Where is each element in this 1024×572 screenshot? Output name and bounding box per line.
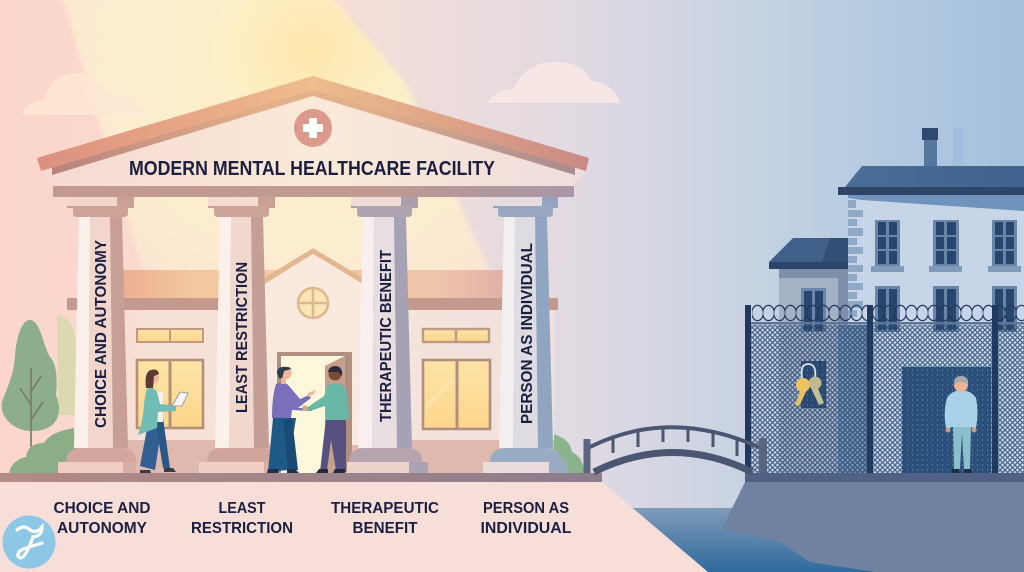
- fence mesh: [751, 325, 1024, 473]
- quoins: [848, 200, 863, 317]
- bridge: [584, 427, 767, 473]
- water: [630, 508, 900, 572]
- fence rail: [751, 322, 1024, 324]
- label: choice and autonomy: CHOICE AND: [54, 500, 150, 517]
- column 4: [483, 197, 568, 473]
- label: least restriction: LEAST: [218, 500, 266, 517]
- column label: choice and autonomy: CHOICE AND AUTONOMY: [93, 240, 110, 428]
- left window: [137, 360, 203, 428]
- eave: [67, 298, 558, 310]
- fence posts: [745, 305, 998, 473]
- column 3: [347, 197, 428, 473]
- porch floor: [76, 440, 554, 473]
- bush right: [552, 434, 584, 473]
- title: MODERN MENTAL HEALTHCARE FACILITY: [129, 158, 496, 180]
- ground strip left: [0, 473, 602, 482]
- cloud right: [488, 62, 620, 103]
- label: choice and autonomy: AUTONOMY: [57, 520, 148, 537]
- sun rays: [60, 0, 505, 345]
- figure: man in teal: [302, 366, 349, 473]
- label: therapeutic benefit: [331, 500, 439, 537]
- side prison wing: [769, 238, 848, 473]
- figure: man in purple: [267, 366, 316, 473]
- windows upper: [871, 220, 904, 272]
- background building: [67, 251, 558, 473]
- central gable: [265, 254, 364, 445]
- right transom window: [423, 329, 489, 342]
- label: person as individual: PERSON AS: [483, 500, 569, 517]
- column label: person as individual: PERSON AS INDIVIDUAL: [519, 243, 536, 424]
- label: least restriction: RESTRICTION: [191, 520, 293, 537]
- cross badge: [294, 109, 332, 147]
- label: therapeutic benefit: THERAPEUTIC: [331, 500, 439, 517]
- label: therapeutic benefit: BENEFIT: [352, 520, 418, 537]
- column 2: [199, 197, 277, 473]
- column label: least restriction: LEAST RESTRICTION: [234, 262, 251, 413]
- keys: [795, 364, 824, 406]
- figure: woman with tablet: [138, 370, 188, 473]
- pediment: [37, 76, 589, 186]
- tree: [2, 315, 76, 447]
- bushes left: [9, 428, 78, 473]
- cloud left: [22, 73, 146, 115]
- right window: [423, 360, 490, 429]
- person in front of fence: [945, 376, 978, 475]
- label: person as individual: [480, 500, 572, 537]
- cliff right: [722, 482, 1024, 572]
- entablature: [53, 186, 574, 197]
- column 1: [58, 197, 136, 473]
- left transom window: [137, 329, 203, 342]
- wall: [76, 310, 554, 442]
- label: choice and autonomy: [54, 500, 150, 537]
- main prison building: [838, 128, 1024, 473]
- logo badge: [2, 516, 56, 568]
- column label: therapeutic benefit: THERAPEUTIC BENEFIT: [378, 250, 395, 422]
- razor wire: [752, 304, 1024, 322]
- roof: [68, 270, 558, 310]
- label: least restriction: [191, 500, 293, 537]
- windows lower: [875, 286, 900, 332]
- door: [277, 352, 352, 473]
- label: person as individual: INDIVIDUAL: [480, 520, 572, 537]
- round window: [298, 288, 328, 318]
- prison door: [902, 367, 991, 473]
- ground slab left: [0, 482, 708, 572]
- ground strip right: [745, 473, 1024, 482]
